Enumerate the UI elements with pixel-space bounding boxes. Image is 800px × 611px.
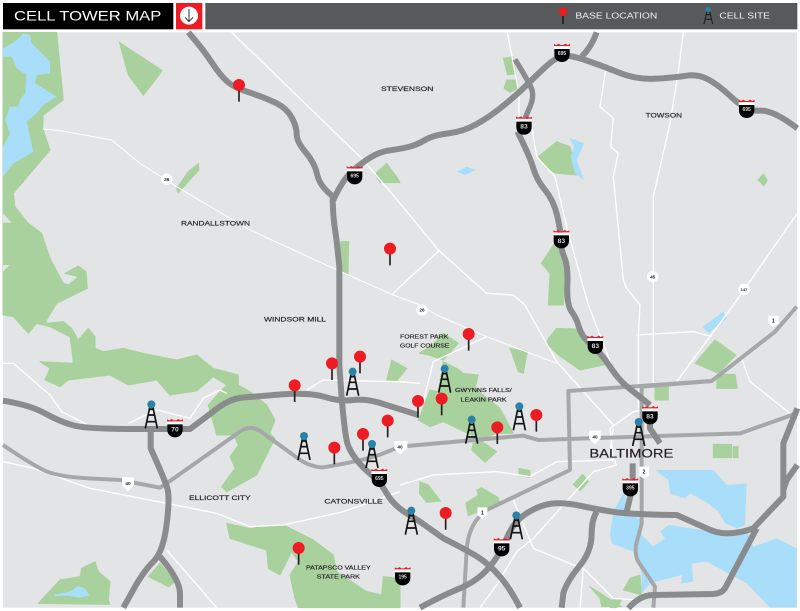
shield 83 upper: 83 (520, 124, 528, 131)
route 147: 147 (741, 287, 748, 292)
shield 695 north: 695 (350, 173, 359, 179)
label Randallstown: RANDALLSTOWN (181, 220, 250, 227)
shield 695 south: 695 (375, 476, 384, 482)
route 40 west: 40 (125, 481, 131, 486)
route 1 south: 1 (481, 510, 484, 516)
legend: cell site: CELL SITE (719, 11, 771, 21)
route 40 west (122, 477, 134, 491)
base location pins (233, 79, 542, 565)
shield 83 downtown (642, 406, 658, 424)
shield 83 middle (553, 230, 569, 248)
place labels (181, 86, 682, 581)
header: title box: CELL TOWER MAP (14, 9, 161, 24)
shield 395: 395 (626, 485, 635, 491)
route 40 middle (394, 441, 407, 455)
shield 83 middle: 83 (558, 238, 565, 245)
label Leakin Park: LEAKIN PARK (461, 397, 508, 403)
route 45 (647, 271, 658, 282)
shield 83 upper (516, 116, 532, 135)
label Golf Course: GOLF COURSE (400, 344, 450, 350)
shield 695 north (347, 166, 363, 184)
header: title box (3, 3, 173, 29)
route 2 (639, 467, 649, 478)
route 40 east (589, 431, 601, 444)
label Patapsco Valley: PATAPSCO VALLEY (306, 566, 372, 572)
route 1 north: 1 (772, 319, 775, 325)
label Forest Park: FOREST PARK (400, 335, 449, 341)
route 1 north (768, 316, 779, 327)
header: download button (176, 3, 202, 29)
cell site towers (145, 365, 645, 539)
shield 395 (622, 478, 638, 496)
shield 83 lower: 83 (592, 343, 599, 350)
shield 195: 195 (398, 574, 407, 580)
route markers (122, 174, 779, 519)
header: legend bar (205, 3, 797, 29)
shield 695 east (739, 100, 755, 118)
shield 83 lower (587, 336, 603, 354)
route 2: 2 (643, 470, 646, 476)
shield 695 top: 695 (558, 51, 566, 57)
interstate shields (167, 44, 755, 585)
label Stevenson: STEVENSON (381, 86, 434, 93)
legend: base location: BASE LOCATION (575, 11, 657, 21)
shield 70 (167, 419, 183, 437)
shield 95: 95 (498, 545, 506, 552)
shield 95 (494, 538, 510, 556)
label Catonsville: CATONSVILLE (324, 498, 383, 505)
label Baltimore: BALTIMORE (589, 446, 673, 460)
shield 70: 70 (171, 426, 179, 433)
left edge notches (3, 213, 12, 272)
legend: base location (559, 7, 657, 24)
route 26 west (161, 174, 172, 185)
shield 83 downtown: 83 (646, 413, 654, 420)
label Ellicott City: ELLICOTT CITY (189, 495, 251, 502)
shield 195 (395, 567, 411, 585)
shield 695 top (554, 44, 570, 62)
secondary roads (3, 307, 797, 608)
route 147 (738, 284, 750, 295)
label Towson: TOWSON (646, 112, 682, 119)
label Gwynns Falls: GWYNNS FALLS/ (455, 388, 513, 394)
route 26 west: 26 (164, 177, 170, 182)
shield 695 south (371, 469, 387, 487)
route 26 east (416, 304, 428, 316)
route 45: 45 (650, 274, 656, 279)
route 26 east: 26 (419, 308, 425, 313)
route 40 east: 40 (592, 434, 598, 439)
route 1 south (477, 507, 487, 519)
route 40 middle: 40 (397, 445, 403, 450)
shield 695 east: 695 (742, 107, 751, 113)
label State Park: STATE PARK (317, 575, 361, 581)
label Windsor Mill: WINDSOR MILL (264, 317, 326, 324)
legend: cell site (704, 7, 771, 24)
